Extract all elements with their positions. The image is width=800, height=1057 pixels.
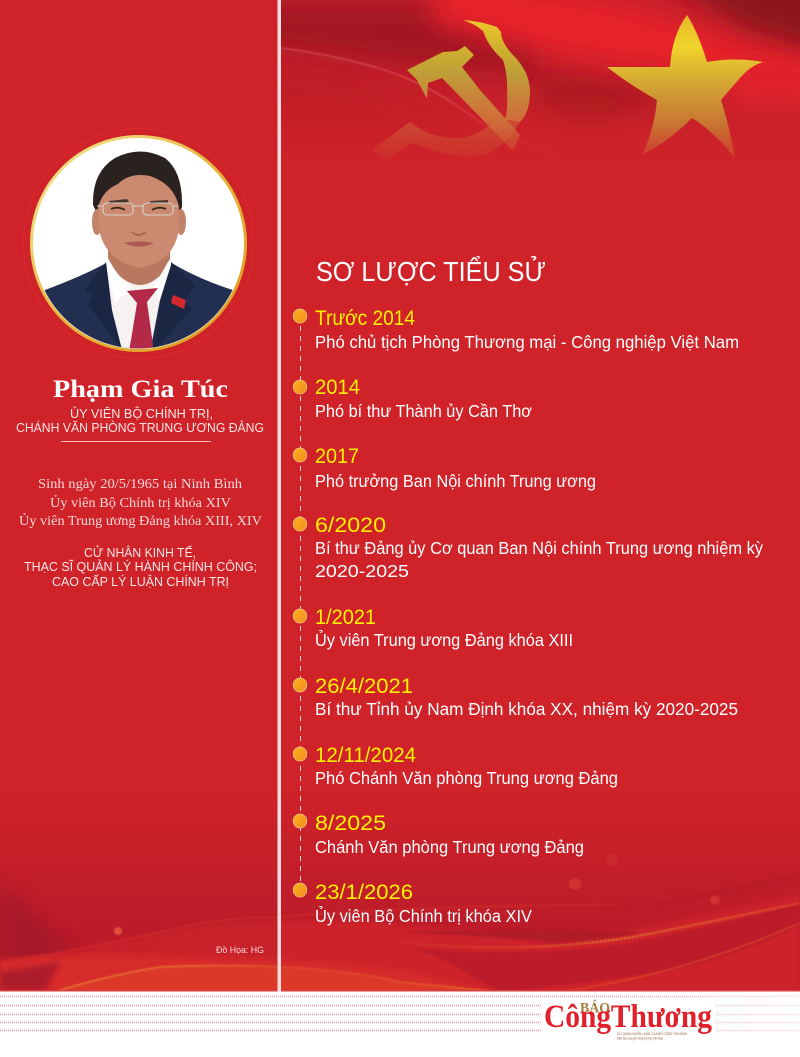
logo: Báo Công Thương: CƠ QUAN NGÔN LUẬN CỦA BỘ CÔNG THƯƠNG bbox=[617, 1031, 687, 1036]
role text: ỦY VIÊN BỘ CHÍNH TRỊ, bbox=[70, 406, 213, 421]
logo: Báo Công Thương: Công Thương bbox=[544, 999, 712, 1035]
milestone: 6/2020: 2020-2025 bbox=[315, 561, 409, 581]
milestone: 26/4/2021 bbox=[293, 674, 738, 719]
education text: CAO CẤP LÝ LUẬN CHÍNH TRỊ bbox=[52, 574, 229, 589]
milestone: 2014: Phó bí thư Thành ủy Cần Thơ bbox=[315, 401, 532, 421]
milestone: 2017: Phó trưởng Ban Nội chính Trung ương bbox=[315, 471, 596, 491]
waving flag banner bbox=[281, 0, 800, 160]
icon: hammer and sickle bbox=[372, 20, 530, 160]
milestone: 2014 bbox=[293, 375, 532, 421]
milestone: 2017: 2017 bbox=[315, 444, 359, 468]
biography text: Ủy viên Trung ương Đảng khóa XIII, XIV bbox=[19, 512, 262, 529]
nose bbox=[132, 232, 146, 235]
milestone: 1/2021 bbox=[293, 605, 573, 650]
face bbox=[98, 175, 179, 268]
milestone: 26/4/2021: 26/4/2021 bbox=[315, 674, 413, 698]
milestone: 6/2020: Bí thư Đảng ủy Cơ quan Ban Nội chính Trung ương nhiệm kỳ bbox=[315, 538, 763, 558]
lapels bbox=[85, 262, 122, 350]
milestone: 8/2025 bbox=[293, 811, 584, 857]
icon: gold star bbox=[607, 15, 763, 158]
hair back bbox=[93, 152, 182, 215]
milestone: 23/1/2026: 23/1/2026 bbox=[315, 880, 413, 904]
education text bbox=[24, 545, 257, 589]
milestone: 8/2025: 8/2025 bbox=[315, 811, 386, 835]
milestone: 23/1/2026 bbox=[293, 880, 532, 926]
suit bbox=[44, 263, 233, 348]
vertical divider bbox=[278, 0, 281, 992]
glasses bbox=[97, 203, 178, 215]
milestone: 12/11/2024 bbox=[293, 743, 618, 788]
logo: Báo Công Thương: BÁO bbox=[580, 1000, 610, 1016]
timeline bbox=[293, 306, 763, 926]
biography text: Sinh ngày 20/5/1965 tại Ninh Bình bbox=[38, 477, 242, 492]
section heading: SƠ LƯỢC TIỂU SỬ bbox=[316, 255, 546, 287]
graphic credit: Đồ Họa: HG bbox=[216, 945, 264, 955]
eyes bbox=[111, 208, 166, 210]
panel: left profile bbox=[16, 128, 264, 955]
biography text: Ủy viên Bộ Chính trị khóa XIV bbox=[50, 494, 231, 511]
brows bbox=[109, 199, 129, 204]
milestone: before 2014: Phó chủ tịch Phòng Thương mại - Công nghiệp Việt Nam bbox=[315, 332, 739, 352]
role text: CHÁNH VĂN PHÒNG TRUNG ƯƠNG ĐẢNG bbox=[16, 420, 264, 435]
milestone: 23/1/2026: Ủy viên Bộ Chính trị khóa XIV bbox=[315, 905, 532, 926]
milestone: 1/2021: 1/2021 bbox=[315, 605, 376, 629]
milestone: 1/2021: Ủy viên Trung ương Đảng khóa XIII bbox=[315, 629, 573, 650]
name heading: Phạm Gia Túc bbox=[53, 376, 228, 403]
milestone: 8/2025: Chánh Văn phòng Trung ương Đảng bbox=[315, 837, 584, 857]
base edge line bbox=[0, 990, 800, 992]
milestone: 2014: 2014 bbox=[315, 375, 360, 399]
milestone: before 2014 bbox=[293, 306, 739, 352]
education text: CỬ NHÂN KINH TẾ, bbox=[84, 545, 196, 560]
neck bbox=[108, 250, 170, 285]
mouth bbox=[124, 242, 154, 246]
milestone: 12/11/2024: 12/11/2024 bbox=[315, 743, 416, 767]
milestone: before 2014: Trước 2014 bbox=[315, 306, 415, 330]
logo: Báo Công Thương: Diễn đàn của giới công thương Việt Nam bbox=[617, 1036, 663, 1040]
lapel pin bbox=[171, 295, 186, 309]
biography text bbox=[19, 477, 262, 529]
milestone: 12/11/2024: Phó Chánh Văn phòng Trung ương Đảng bbox=[315, 768, 618, 788]
collar bbox=[106, 258, 132, 303]
milestone: 6/2020 bbox=[293, 513, 763, 581]
portrait bbox=[20, 128, 260, 360]
ears bbox=[92, 209, 100, 235]
decorative wave band bbox=[0, 848, 800, 990]
shirt bbox=[106, 263, 162, 348]
role text bbox=[16, 406, 264, 435]
milestone: 2017 bbox=[293, 444, 596, 491]
milestone: 6/2020: 6/2020 bbox=[315, 513, 386, 537]
education text: THẠC SĨ QUẢN LÝ HÀNH CHÍNH CÔNG; bbox=[24, 559, 257, 574]
tie bbox=[127, 288, 158, 348]
milestone: 26/4/2021: Bí thư Tỉnh ủy Nam Định khóa XX, nhiệm kỳ 2020-2025 bbox=[315, 699, 738, 719]
